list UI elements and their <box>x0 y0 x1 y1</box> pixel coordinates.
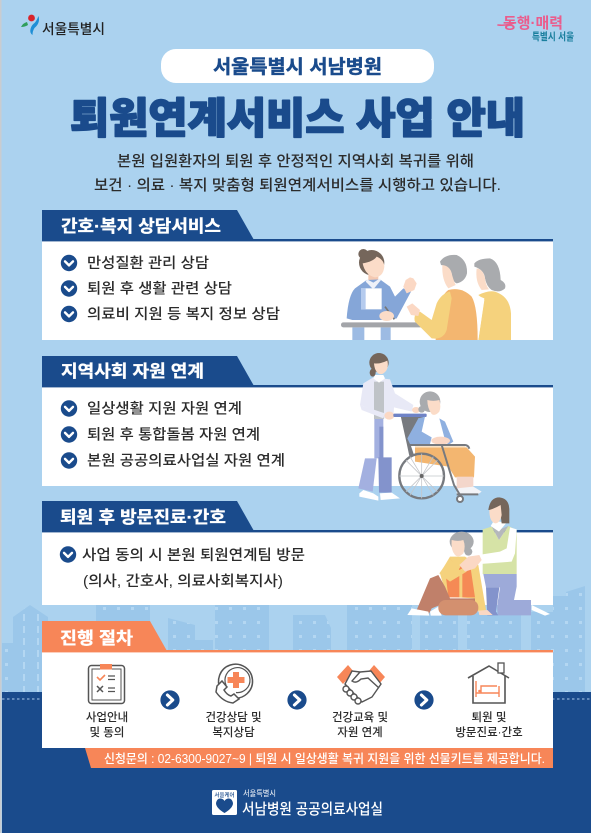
illustration: nurse consulting seniors <box>341 249 511 340</box>
list: counselling <box>61 255 280 323</box>
step label 4 <box>455 710 523 739</box>
list: home visit: (의사, 간호사, 의료사회복지사) <box>83 573 283 590</box>
step label 4: 방문진료·간호 <box>455 726 523 739</box>
list: counselling: 의료비 지원 등 복지 정보 상담 <box>87 306 280 323</box>
intro text: 보건 · 의료 · 복지 맞춤형 퇴원연계서비스를 시행하고 있습니다. <box>94 177 501 194</box>
panel: home visit <box>42 497 553 616</box>
intro text: 본원 입원환자의 퇴원 후 안정적인 지역사회 복귀를 위해 <box>117 153 474 170</box>
step label 1: 및 동의 <box>90 726 124 739</box>
list: home visit <box>60 546 305 590</box>
step label 3 <box>332 711 388 739</box>
logo: slogan: 동행·매력 <box>503 15 563 32</box>
intro text <box>94 153 501 194</box>
list: counselling: 만성질환 관리 상담 <box>87 255 209 272</box>
organisation pill <box>161 49 434 83</box>
logo: slogan <box>498 15 574 43</box>
panel: process steps <box>42 621 553 748</box>
illustration: carer with senior <box>407 497 550 616</box>
heading tab: home visit: 퇴원 후 방문진료·간호 <box>60 508 226 527</box>
heading tab: process: 진행 절차 <box>60 629 133 648</box>
step label 1: 사업안내 <box>86 711 128 724</box>
step label 2: 복지상담 <box>212 726 255 739</box>
logo: slogan: 특별시 서울 <box>532 30 574 43</box>
logo: Seoul city <box>21 15 105 37</box>
icon: clipboard <box>88 664 124 704</box>
footer logo: 서울케어 <box>214 791 235 799</box>
arrow 2 <box>287 690 307 710</box>
footer logo: 서남병원 공공의료사업실 <box>242 801 383 818</box>
icon: house with bed <box>468 663 509 703</box>
organisation pill: 서울특별시 서남병원 <box>213 56 382 78</box>
navy footer band <box>2 692 591 833</box>
panel: counselling service <box>42 210 553 340</box>
arrow 3 <box>414 690 434 710</box>
contact bar <box>85 748 553 768</box>
list: community: 퇴원 후 통합돌봄 자원 연계 <box>87 426 260 444</box>
list: counselling: 퇴원 후 생활 관련 상담 <box>87 280 232 298</box>
illustration: nurse pushing wheelchair <box>358 353 482 502</box>
heading tab: community <box>42 356 254 386</box>
step label 2 <box>205 711 262 739</box>
step label 3: 건강교육 및 <box>332 711 388 724</box>
logo: Seoul city: 서울특별시 <box>42 21 105 37</box>
icon: handshake <box>337 665 385 704</box>
step label 2: 건강상담 및 <box>205 711 262 724</box>
heading tab: counselling: 간호·복지 상담서비스 <box>61 217 221 236</box>
footer logo: 서울특별시 <box>243 788 276 798</box>
step label 1 <box>86 711 128 739</box>
heading tab: home visit <box>42 501 254 531</box>
list: community: 본원 공공의료사업실 자원 연계 <box>87 452 285 470</box>
city skyline <box>2 586 585 692</box>
title: 퇴원연계서비스 사업 안내 <box>70 95 525 142</box>
panel: community resources <box>42 353 553 502</box>
step label 4: 퇴원 및 <box>472 710 506 724</box>
heading tab: community: 지역사회 자원 연계 <box>61 362 204 381</box>
contact bar: 신청문의 : 02-6300-9027~9 | 퇴원 시 일상생활 복귀 지원을 위한 선물키트를 제공합니다. <box>104 751 545 766</box>
list: community <box>61 400 285 470</box>
step label 3: 자원 연계 <box>337 725 383 739</box>
arrow 1 <box>160 690 180 710</box>
footer logo <box>212 788 383 818</box>
list: home visit: 사업 동의 시 본원 퇴원연계팀 방문 <box>82 547 305 564</box>
heading tab: process <box>42 621 167 651</box>
list: community: 일상생활 지원 자원 연계 <box>87 400 242 418</box>
heading tab: counselling <box>42 210 254 240</box>
icon: phone and medical cross <box>216 664 253 703</box>
